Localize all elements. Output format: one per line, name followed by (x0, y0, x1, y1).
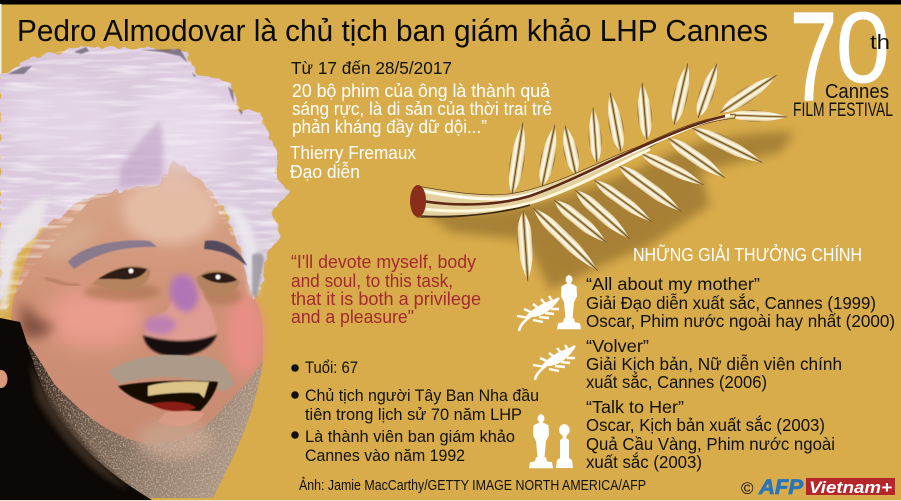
hair (0, 40, 300, 320)
facts list: Cannes vào năm 1992 (305, 447, 465, 465)
eyes (92, 266, 240, 293)
quote by Thierry Fremaux: sáng rực, là di sản của thời trai trẻ (292, 99, 552, 119)
quote in red: “I'll devote myself, body (291, 252, 476, 272)
quote by Thierry Fremaux: Thierry Fremaux (290, 143, 416, 163)
award: All about my mother: “All about my mother” (586, 274, 760, 294)
award: Talk to Her: xuất sắc (2003) (586, 451, 702, 472)
palm stem cut end (410, 185, 426, 217)
award: Talk to Her: Quả Cầu Vàng, Phim nước ngoài (586, 434, 835, 454)
mouth and teeth (118, 381, 218, 426)
award: Talk to Her: Oscar, Kịch bản xuất sắc (2003) (586, 414, 825, 435)
AFP and Vietnam+ logo: Vietnam+ (809, 478, 892, 497)
portrait of Pedro Almodovar (0, 40, 300, 500)
facts list: tiên trong lịch sử 70 năm LHP (305, 406, 522, 424)
th: th (870, 32, 890, 54)
70th Cannes logo (790, 0, 893, 127)
palm leaves (505, 61, 788, 282)
palm branch (410, 61, 795, 290)
quote by Thierry Fremaux (290, 81, 552, 182)
icon: Oscar statuette 1 (557, 275, 581, 329)
icon: Oscar statuette 2 (529, 414, 553, 468)
award: All about my mother (586, 274, 895, 331)
quote by Thierry Fremaux: phản kháng đầy dữ dội...” (292, 117, 487, 137)
award: All about my mother: Giải Đạo diễn xuất sắc, Cannes (1999) (586, 292, 876, 313)
award: All about my mother: Oscar, Phim nước ngoài hay nhất (2000) (586, 311, 895, 331)
award: Volver: xuất sắc, Cannes (2006) (586, 371, 767, 392)
award: Talk to Her: “Talk to Her” (586, 397, 684, 417)
palm stem (417, 114, 735, 218)
title: Pedro Almodovar là chủ tịch ban giám khảo LHP Cannes (17, 13, 768, 48)
palm shadow (417, 132, 795, 290)
quote in red: and a pleasure" (291, 307, 414, 327)
facts list: Tuổi: 67 (305, 359, 358, 377)
icon: Golden Globe (556, 424, 573, 468)
AFP and Vietnam+ logo (741, 476, 895, 499)
icon: palm 1 (517, 296, 560, 331)
quote in red: that it is both a privilege (291, 289, 481, 309)
quote by Thierry Fremaux: 20 bộ phim của ông là thành quả (292, 81, 551, 101)
award: Volver: “Volver” (586, 336, 649, 356)
facts list: Chủ tịch người Tây Ban Nha đầu (305, 387, 539, 405)
awards heading: NHỮNG GIẢI THƯỞNG CHÍNH (633, 244, 862, 265)
date line: Từ 17 đến 28/5/2017 (291, 58, 452, 78)
face skin (10, 150, 263, 498)
quote by Thierry Fremaux: Đạo diễn (290, 161, 360, 182)
nose (143, 271, 217, 356)
photo credit: Ảnh: Jamie MacCarthy/GETTY IMAGE NORTH AMERICA/AFP (299, 477, 646, 494)
award: Volver (586, 336, 842, 392)
facts list (291, 359, 539, 465)
Cannes: Cannes (825, 80, 889, 103)
quote in red: and soul, to this task, (291, 271, 453, 291)
award: Talk to Her (586, 397, 835, 472)
beard and dark collar (0, 318, 280, 500)
facts list: Là thành viên ban giám khảo (305, 428, 515, 446)
award: Volver: Giải Kịch bản, Nữ diễn viên chính (586, 353, 842, 374)
quote in red (291, 252, 481, 327)
brows (68, 240, 247, 269)
icon: palm 2 (533, 345, 576, 380)
AFP and Vietnam+ logo: AFP (758, 476, 804, 499)
AFP and Vietnam+ logo: © (741, 479, 754, 498)
moustache (108, 355, 234, 392)
